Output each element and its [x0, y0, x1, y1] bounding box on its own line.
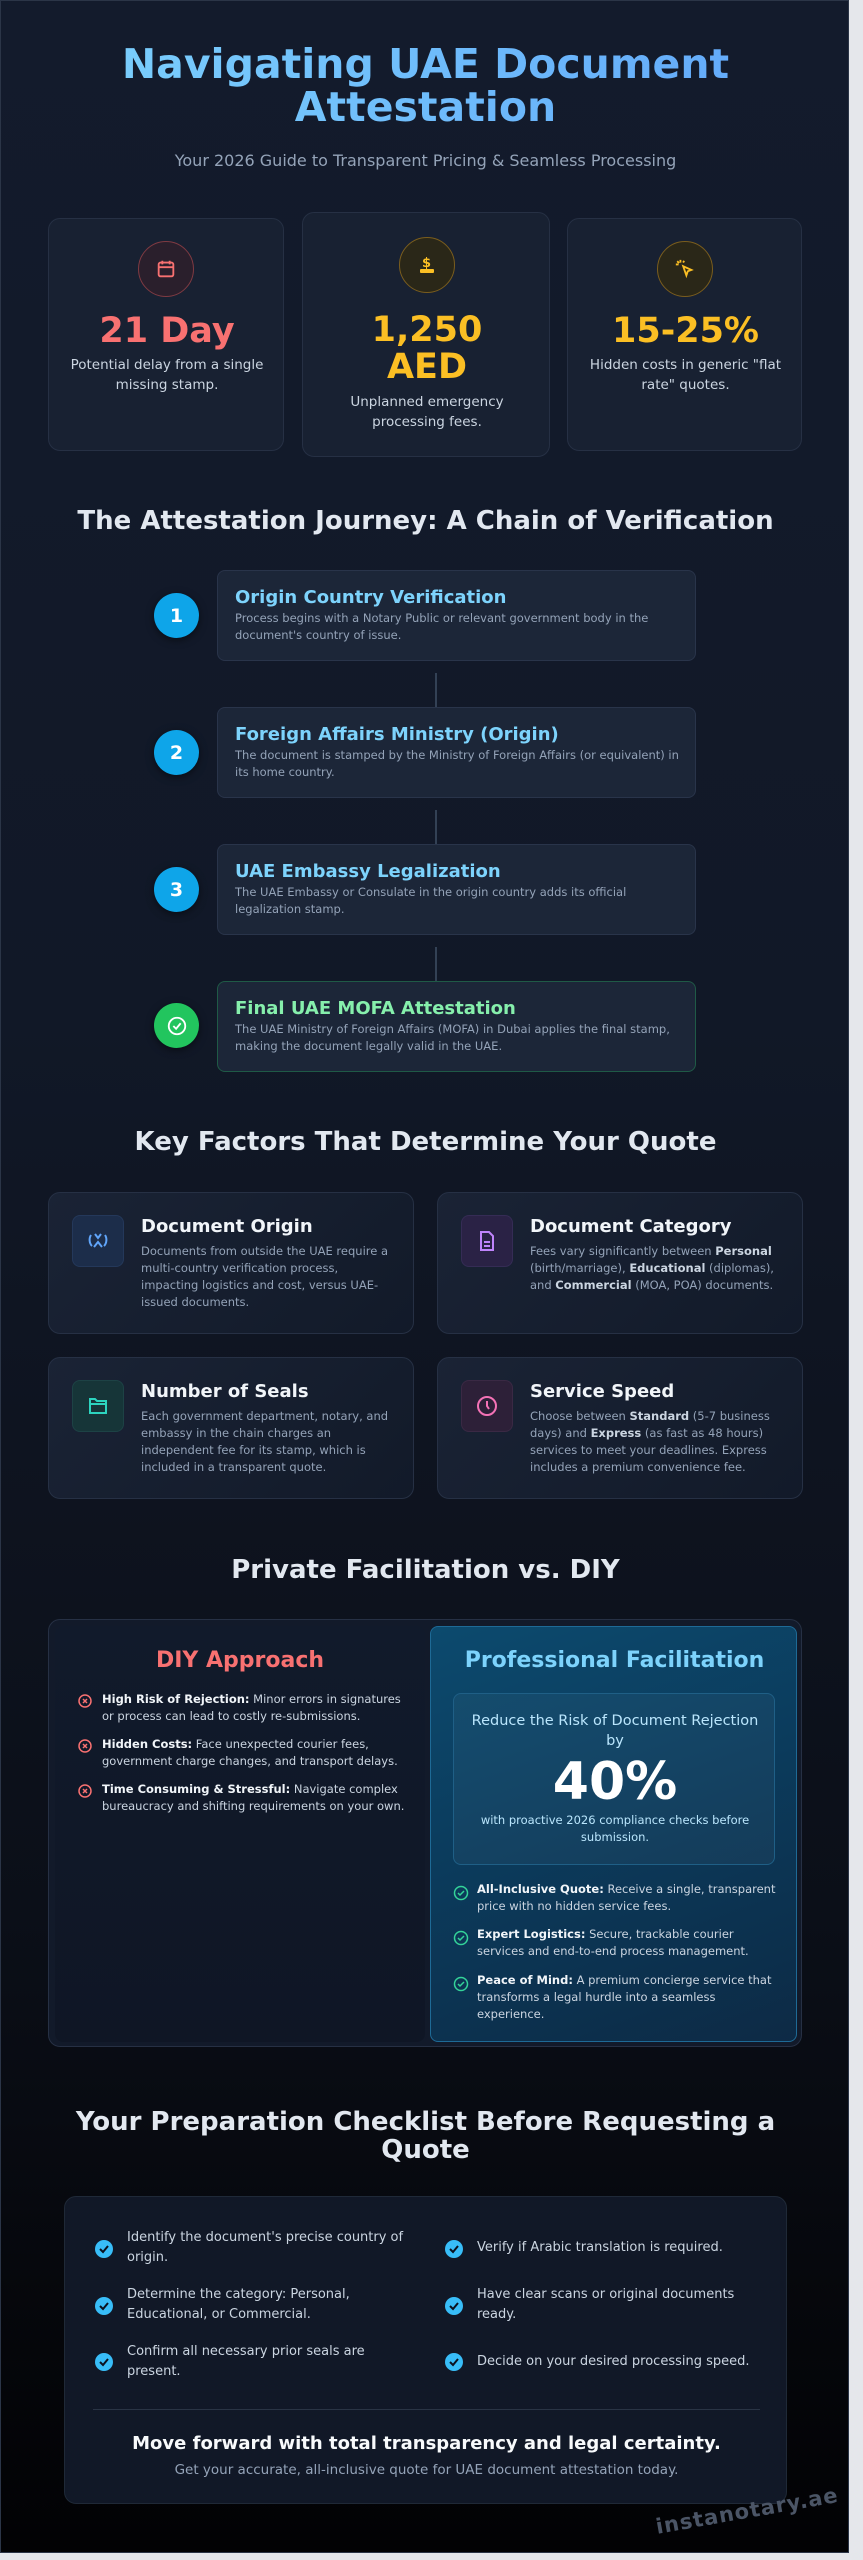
step 2 card	[217, 707, 696, 798]
factor: document origin: Document Origin	[141, 1216, 313, 1237]
professional column	[430, 1626, 797, 2042]
factor: document category: Document Category	[530, 1216, 731, 1237]
step 3 card: UAE Embassy Legalization	[235, 861, 501, 882]
icon: document	[461, 1215, 513, 1267]
stat description: Potential delay from a single missing stamp.	[71, 357, 263, 393]
DIY item 3: Time Consuming & Stressful: Navigate complex bureaucracy and shifting requirements on your own.	[102, 1782, 404, 1813]
factor: document origin	[48, 1192, 414, 1334]
stat card: 15-25%	[567, 218, 802, 451]
DIY heading: DIY Approach	[156, 1648, 324, 1673]
icon: money: $	[422, 256, 431, 271]
checklist panel: Decide on your desired processing speed.	[477, 2354, 750, 2369]
step 2 number	[154, 730, 199, 775]
factor: service speed	[437, 1357, 803, 1499]
heading: private vs DIY: Private Facilitation vs. DIY	[231, 1555, 620, 1585]
step 4 card	[217, 981, 696, 1072]
DIY column	[55, 1626, 425, 2042]
checklist panel: Determine the category: Personal, Educational, or Commercial.	[127, 2287, 350, 2322]
stat description: Hidden costs in generic "flat rate" quotes.	[590, 357, 781, 393]
checklist items left: Identify the document's precise country of origin.	[127, 2230, 403, 2265]
title	[1, 43, 850, 129]
stat number	[372, 310, 482, 387]
stat number: AED	[387, 347, 467, 387]
step 4 card: The UAE Ministry of Foreign Affairs (MOFA) in Dubai applies the final stamp, making the document legally valid in the UAE.	[235, 1022, 670, 1053]
comparison panel	[48, 1619, 802, 2047]
factor: service speed: Choose between Standard (5-7 business days) and Express (as fast as 48 hours) services to meet your deadlines. Express includes a premium convenience fee.	[530, 1409, 770, 1474]
stat card: 21 day	[48, 218, 284, 451]
step 1 card	[217, 570, 696, 661]
icons: x marks	[78, 1694, 92, 1798]
callout: 40%: with proactive 2026 compliance checks before submission.	[481, 1813, 749, 1844]
step 1 number	[154, 593, 199, 638]
factor: document category	[437, 1192, 803, 1334]
checklist panel	[64, 2196, 787, 2504]
factor: document category: Fees vary significantly between Personal (birth/marriage), Educational (diplomas), and Commercial (MOA, POA) documents.	[530, 1244, 774, 1292]
step 3 card	[217, 844, 696, 935]
factor: number of seals	[48, 1357, 414, 1499]
stat number: 15-25%	[612, 311, 759, 351]
step 4 icon: check	[154, 1003, 199, 1048]
professional heading: Professional Facilitation	[465, 1648, 764, 1673]
factor: document origin: Documents from outside the UAE require a multi-country verification process, impacting logistics and cost, versus UAE-issued documents.	[141, 1244, 388, 1309]
icons: check marks	[454, 1886, 468, 1992]
step 1 number: 1	[170, 604, 183, 626]
pro item 1: All-Inclusive Quote: Receive a single, transparent price with no hidden service fees.	[477, 1882, 775, 1913]
icon: clock	[461, 1380, 513, 1432]
factor: number of seals: Each government department, notary, and embassy in the chain charges an independent fee for its stamp, which is included in a transparent quote.	[141, 1409, 388, 1474]
heading: checklist	[76, 2107, 775, 2165]
checklist panel: Have clear scans or original documents ready.	[477, 2287, 734, 2322]
step 4 card: Final UAE MOFA Attestation	[235, 998, 516, 1019]
step 2 card: Foreign Affairs Ministry (Origin)	[235, 724, 559, 745]
checklist panel: Confirm all necessary prior seals are present.	[127, 2344, 365, 2379]
stat card: 1,250 AED	[302, 212, 550, 457]
step 2 number: 2	[170, 742, 183, 764]
watermark: instanotary.ae	[654, 2483, 840, 2539]
professional list	[454, 1882, 776, 2021]
icon: globe	[72, 1215, 124, 1267]
DIY list	[78, 1692, 404, 1813]
pro item 3: Peace of Mind: A premium concierge service that transforms a legal hurdle into a seamless experience.	[477, 1973, 772, 2021]
callout: 40%	[453, 1693, 775, 1865]
closing statement: Move forward with total transparency and legal certainty.	[132, 2433, 721, 2454]
icon: cursor click	[657, 241, 713, 297]
callout: 40%: Reduce the Risk of Document Rejection by	[472, 1713, 758, 1749]
step 3 card: The UAE Embassy or Consulate in the origin country adds its official legalization stamp.	[235, 885, 626, 916]
step 3 number	[154, 867, 199, 912]
icon: folder	[72, 1380, 124, 1432]
step 2 card: The document is stamped by the Ministry of Foreign Affairs (or equivalent) in its home country.	[235, 748, 679, 779]
title: Attestation	[295, 83, 556, 131]
title: Navigating UAE Document	[122, 40, 729, 88]
stat description: Unplanned emergency processing fees.	[350, 394, 504, 430]
DIY item 1: High Risk of Rejection: Minor errors in signatures or process can lead to costly re-submissions.	[102, 1692, 401, 1723]
step 1 card: Process begins with a Notary Public or relevant government body in the document's country of issue.	[235, 611, 648, 642]
heading: key factors: Key Factors That Determine Your Quote	[135, 1127, 716, 1157]
factor: service speed: Service Speed	[530, 1381, 674, 1402]
stat number: 21 Day	[99, 311, 235, 351]
icons: check badges	[95, 2240, 463, 2371]
icon: calendar	[138, 241, 194, 297]
checklist items right: Verify if Arabic translation is required.	[477, 2240, 723, 2255]
step 1 card: Origin Country Verification	[235, 587, 506, 608]
callout: 40%: 40%	[553, 1752, 677, 1812]
heading: checklist: Quote	[381, 2135, 470, 2165]
DIY item 2: Hidden Costs: Face unexpected courier fees, government charge changes, and transport delays.	[102, 1737, 398, 1768]
heading: attestation journey: The Attestation Journey: A Chain of Verification	[77, 506, 774, 536]
pro item 2: Expert Logistics: Secure, trackable courier services and end-to-end process management.	[477, 1927, 749, 1958]
factor: number of seals: Number of Seals	[141, 1381, 309, 1402]
icon: money	[399, 237, 455, 293]
closing subtext: Get your accurate, all-inclusive quote for UAE document attestation today.	[175, 2462, 678, 2478]
heading: checklist: Your Preparation Checklist Before Requesting a	[76, 2107, 775, 2137]
step 3 number: 3	[170, 878, 183, 900]
stat number: 1,250	[372, 310, 482, 350]
subtitle: Your 2026 Guide to Transparent Pricing & Seamless Processing	[175, 151, 676, 170]
